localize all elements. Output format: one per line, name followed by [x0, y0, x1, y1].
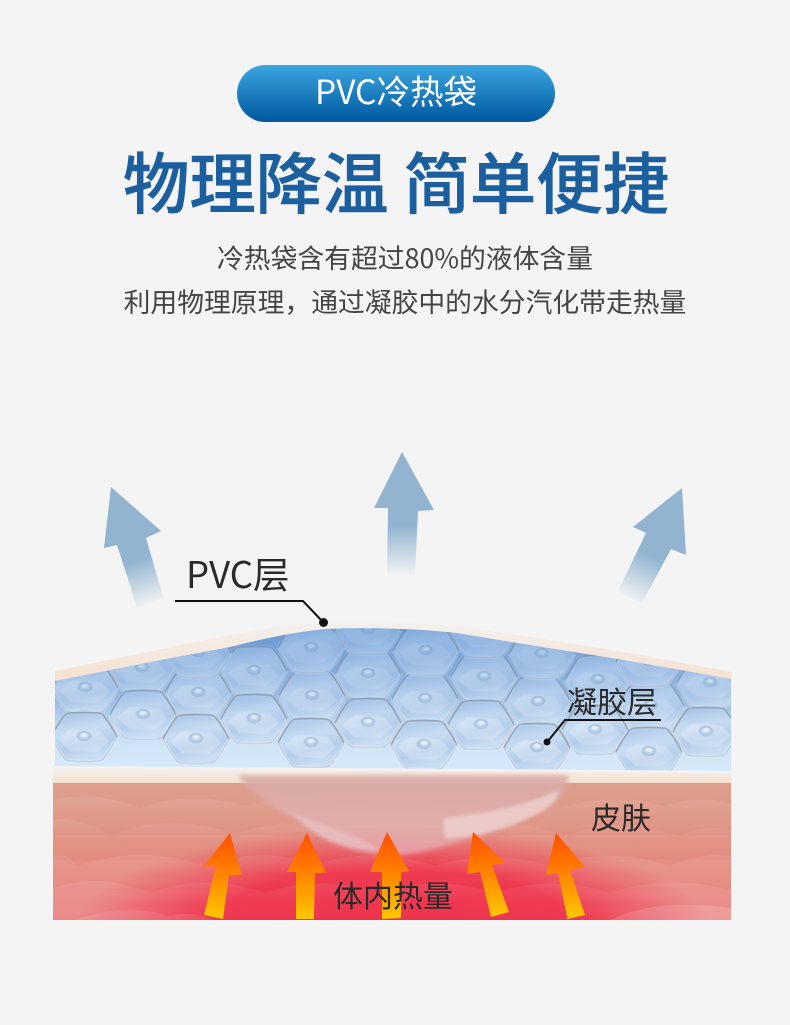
arrow: right vapour	[617, 488, 686, 603]
text block: description: 冷热袋含有超过80%的液体含量	[217, 237, 593, 276]
callout: PVC层: PVC层	[186, 546, 289, 599]
arrow: heat 5	[546, 833, 585, 919]
text block: description	[124, 237, 686, 320]
PVC bottom layer	[53, 768, 731, 783]
label: 皮肤: 皮肤	[591, 794, 651, 838]
arrow: heat 4	[467, 832, 509, 917]
arrow: heat 2	[287, 833, 326, 919]
text block: description: 利用物理原理，通过凝胶中的水分汽化带走热量	[124, 281, 686, 320]
arrow: heat 1	[203, 833, 242, 919]
cooling zone	[238, 775, 568, 855]
badge: PVC冷热袋	[237, 65, 555, 122]
label: 体内热量: 体内热量	[333, 872, 453, 916]
arrow: centre vapour	[374, 452, 434, 575]
callout: PVC层	[175, 546, 328, 627]
diagram: cold pack layers	[50, 606, 743, 920]
arrow: heat 3	[370, 832, 409, 919]
callout: 凝胶层: 凝胶层	[567, 678, 657, 722]
arrow: left vapour	[104, 487, 164, 607]
badge: PVC冷热袋: PVC冷热袋	[315, 65, 477, 114]
title: 物理降温 简单便捷	[123, 132, 669, 228]
PVC top layer	[55, 621, 731, 684]
callout: 凝胶层	[544, 678, 661, 746]
gel layer	[55, 628, 731, 771]
cooling highlight	[443, 790, 558, 838]
skin layer	[53, 783, 731, 920]
cooling highlight left	[290, 812, 378, 850]
